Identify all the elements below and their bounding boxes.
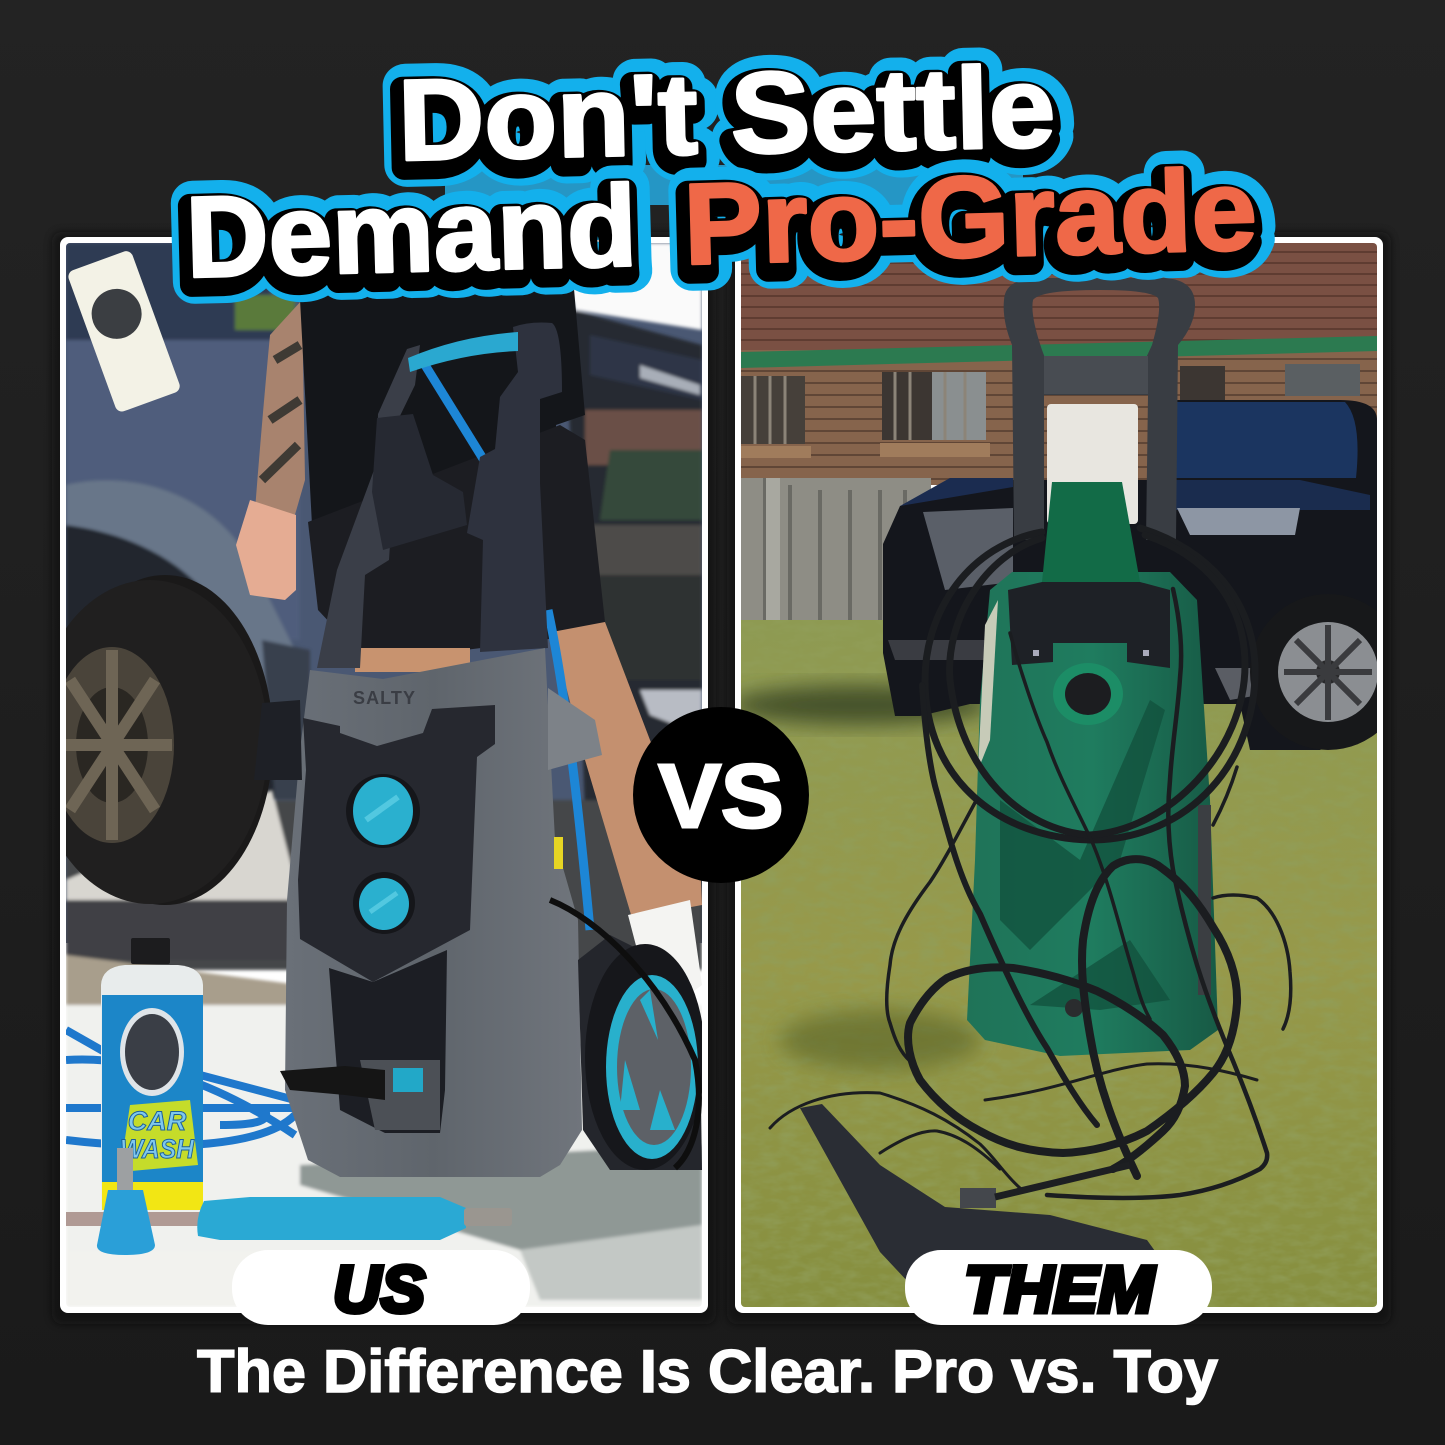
crossbar — [1044, 356, 1148, 394]
pressure washer: them — [770, 278, 1291, 1300]
tire — [66, 575, 270, 905]
wheel — [578, 935, 705, 1170]
panel: us photo — [32, 237, 708, 1313]
title line 2: Demand — [184, 167, 639, 307]
spray gun — [800, 1104, 1160, 1300]
person — [236, 243, 702, 1005]
label text 2: WASH — [120, 1134, 194, 1164]
bracket left — [264, 700, 302, 780]
blue hoses — [66, 1030, 295, 1146]
knob — [1053, 663, 1123, 725]
title line 1: Don't Settle — [394, 51, 1054, 193]
ground — [66, 790, 702, 1307]
green body — [967, 572, 1218, 1056]
label text: CAR — [128, 1106, 187, 1136]
pressure washer: us — [254, 322, 705, 1177]
title line 2: Pro-Grade — [682, 151, 1258, 294]
truck background — [66, 243, 702, 943]
title line 2: Pro-Grade — [682, 146, 1258, 289]
us label pill — [232, 1250, 530, 1326]
handle — [1004, 278, 1195, 540]
hoses — [770, 528, 1291, 1198]
body — [285, 648, 582, 1177]
tagline: The Difference Is Clear. Pro vs. Toy — [197, 1338, 1219, 1405]
fence — [741, 478, 931, 625]
white tank — [1047, 404, 1138, 524]
control panel — [298, 705, 495, 982]
title line 2: Demand — [182, 170, 636, 310]
green cap — [1042, 482, 1140, 582]
vs badge — [633, 707, 809, 883]
car wash bottle — [101, 938, 203, 1210]
title line 2: Pro-Grade — [679, 154, 1255, 297]
yellow sticker — [554, 837, 563, 869]
knob 1 — [346, 774, 420, 848]
title — [181, 43, 1258, 310]
lower recess — [329, 950, 447, 1133]
bracket right — [548, 688, 602, 770]
title line 1: Don't Settle — [397, 48, 1056, 190]
them label pill: THEM — [964, 1252, 1156, 1326]
handle — [317, 322, 562, 668]
base inlet — [1065, 999, 1083, 1017]
hose behind washer — [425, 365, 590, 930]
panel: them photo — [730, 237, 1406, 1313]
grass — [730, 620, 1377, 1307]
logo: SALTY — [353, 688, 415, 708]
title band — [445, 165, 1023, 205]
title line 2 — [181, 146, 1258, 310]
hose connector — [280, 1066, 385, 1100]
house — [741, 243, 1377, 485]
vs badge: VS — [658, 747, 784, 847]
black section — [1008, 582, 1170, 668]
them label pill — [905, 1250, 1212, 1326]
power cord — [550, 900, 699, 1168]
car — [883, 400, 1406, 750]
screws — [1033, 650, 1149, 656]
title line 2: Demand — [184, 162, 638, 302]
us label pill: US — [333, 1252, 425, 1326]
foam bottle — [66, 249, 182, 413]
title line 1: Don't Settle — [397, 43, 1056, 185]
lance — [66, 1197, 512, 1240]
foam nozzle — [97, 1148, 155, 1255]
knob 2 — [353, 872, 415, 934]
